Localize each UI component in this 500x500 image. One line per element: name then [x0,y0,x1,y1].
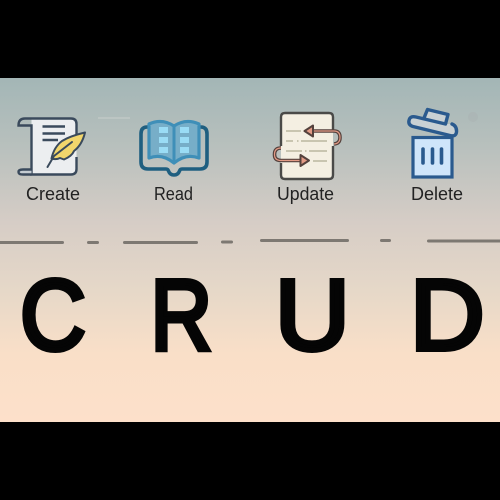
icon: document with arrows [274,113,340,179]
label: Update: Update [277,184,334,204]
title: CRUD letters: C [20,260,86,372]
faint spot [468,112,478,122]
label: Read: Read [154,184,193,204]
title: CRUD letters: D [410,260,485,372]
title: CRUD letters: R [150,260,212,372]
title: CRUD letters [20,260,485,372]
faint highlight streak [98,118,130,119]
gradient panel [0,78,500,422]
icon: open book [141,121,207,175]
label: Create: Create [26,184,80,204]
dashed divider [0,239,500,244]
label: Delete: Delete [411,184,463,204]
title: CRUD letters: U [275,260,350,372]
icon: trash can [409,110,457,177]
icon: scroll with feather [18,118,85,174]
